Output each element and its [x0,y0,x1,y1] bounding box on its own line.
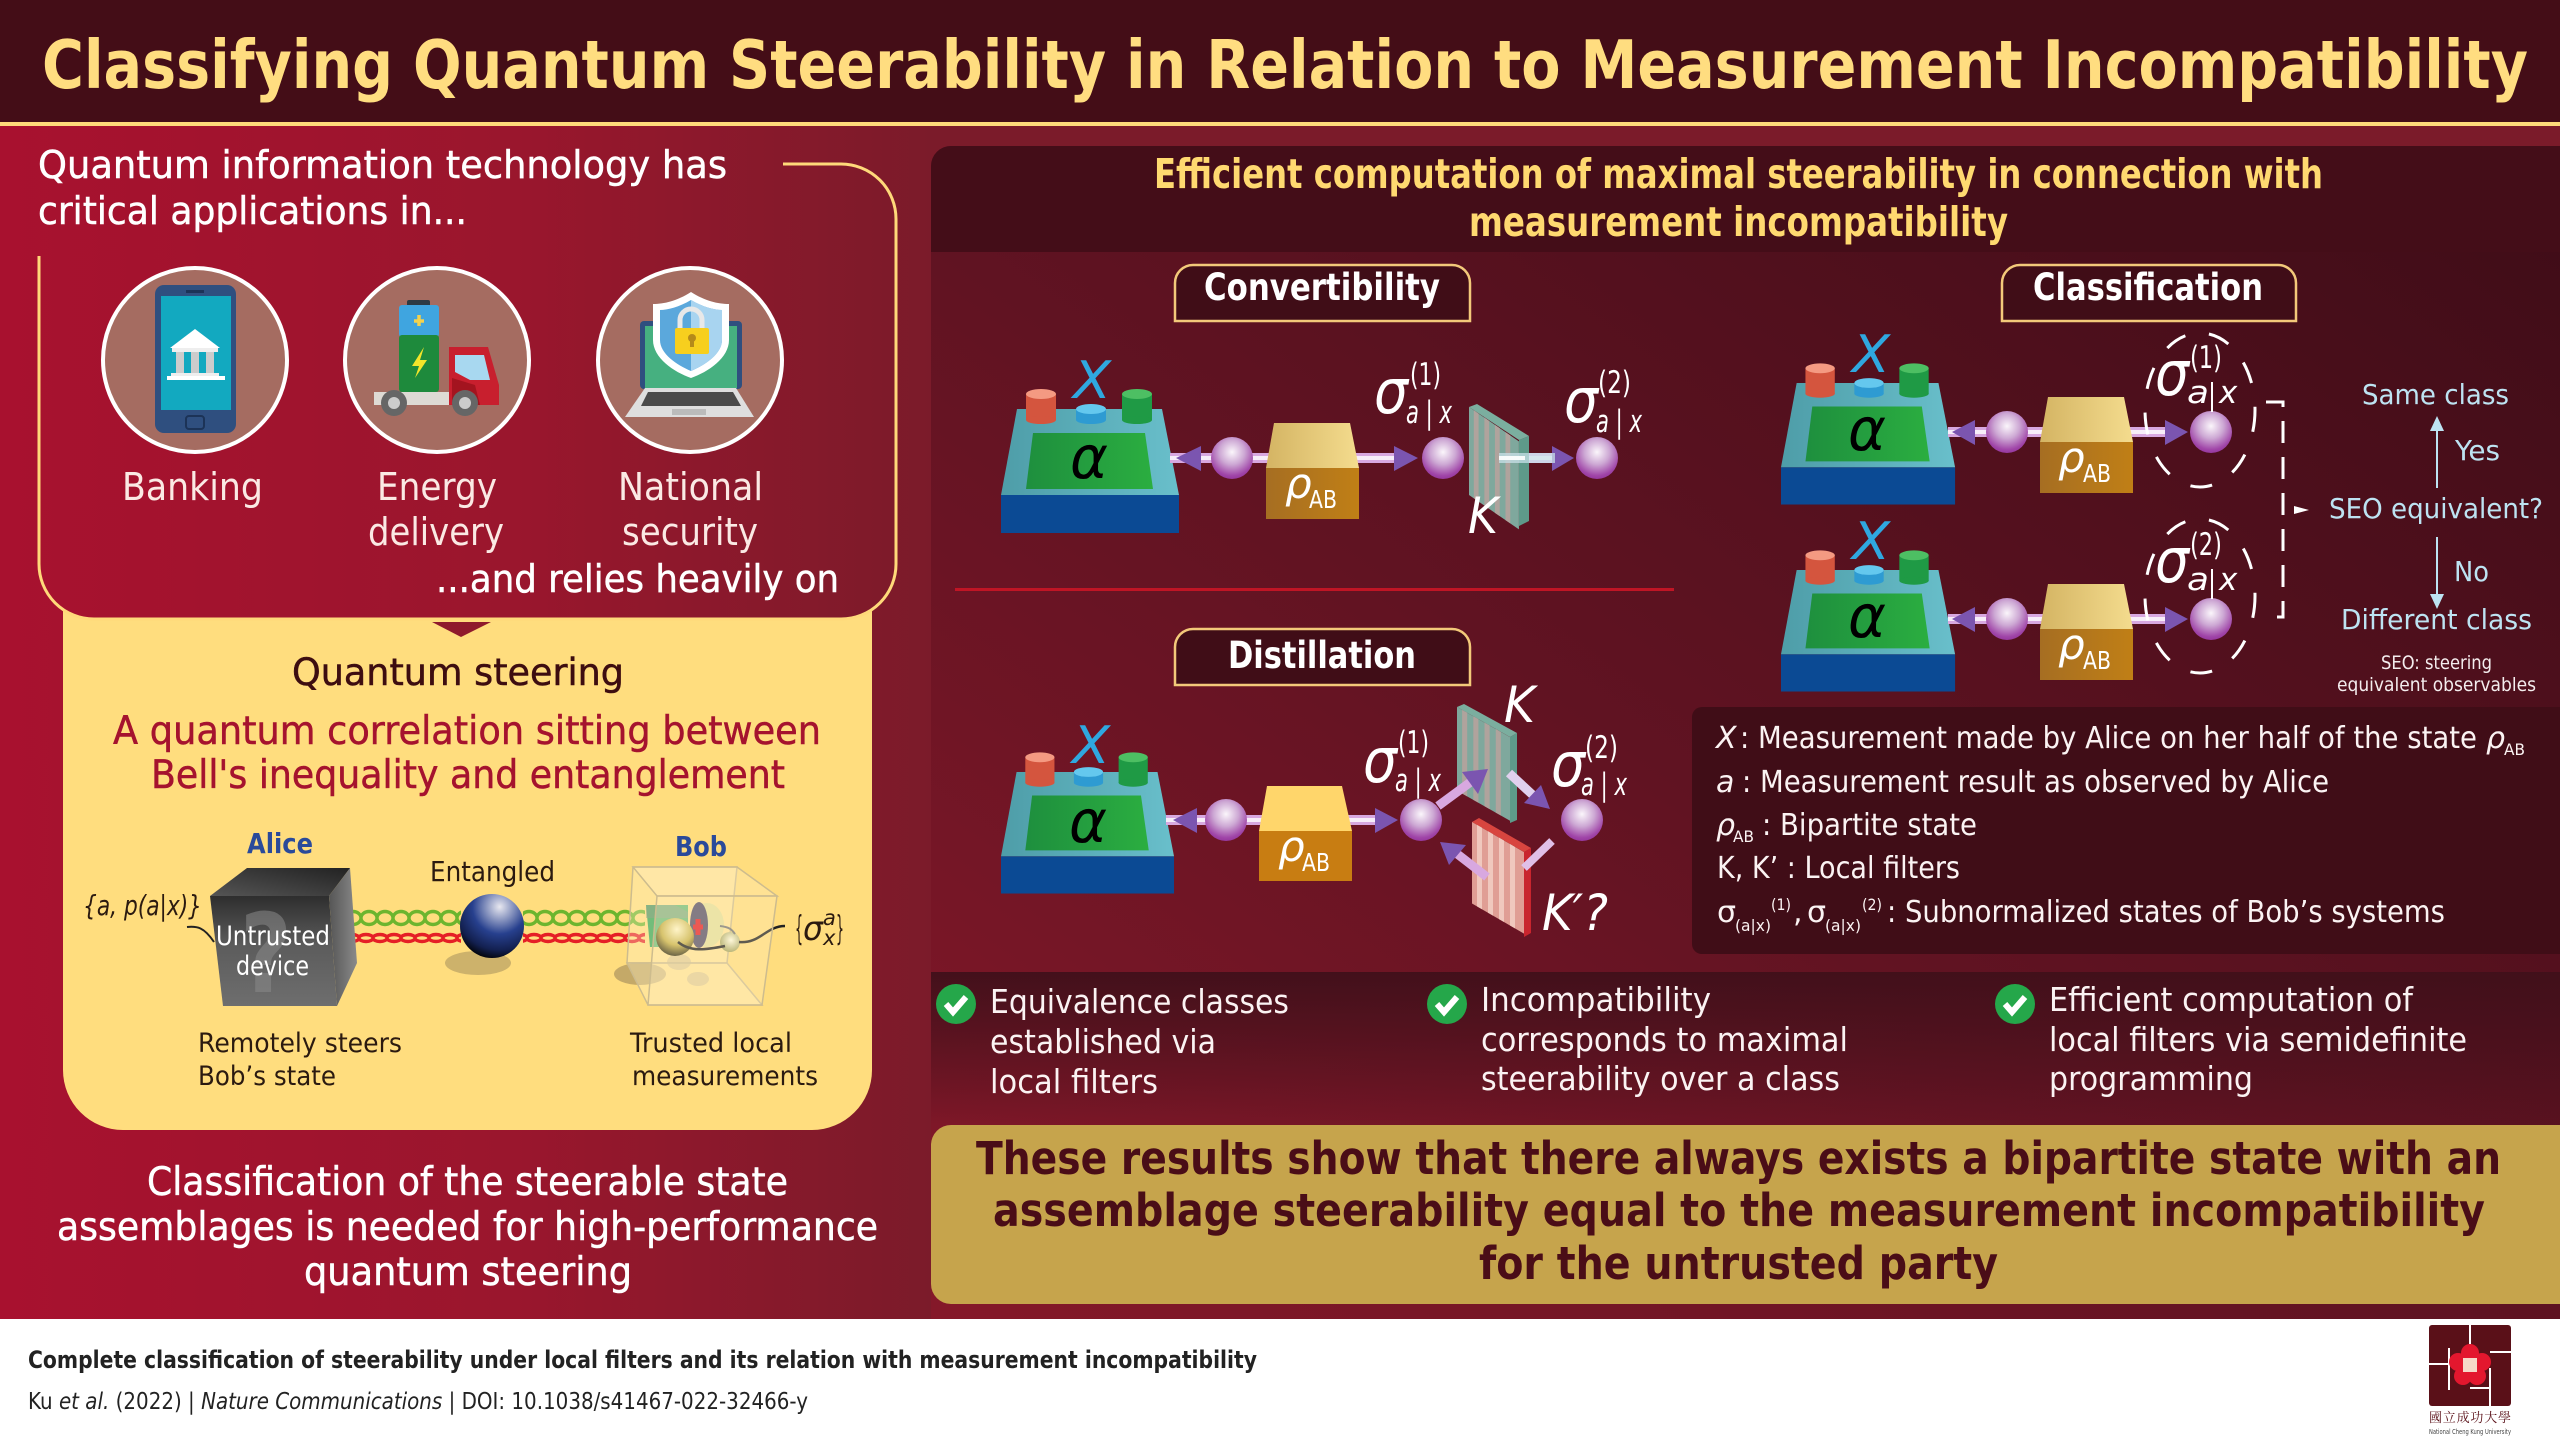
text: Energy delivery [368,465,504,554]
diagram row 2: x [2218,562,2238,598]
entangled sphere [445,894,524,975]
legend panel: ρ [1716,808,1735,843]
Alice output label: {a, p(a|x)} [83,889,202,922]
left conclusion text: assemblages is needed for high-performance [57,1205,878,1250]
label box: Classification [2002,265,2296,321]
text: National security: National [618,465,763,509]
text: Banking: Banking [122,465,263,509]
legend panel: , [1793,895,1803,930]
SEO note: equivalent observables [2337,674,2536,696]
heading text: measurement incompatibility [1469,198,2008,246]
diagram: filter K: K [1468,487,1502,545]
legend panel [1692,707,2560,954]
diagram row 1: AB [2083,459,2111,488]
text: National security: security [622,510,758,554]
diagram: filter K [1468,404,1555,545]
label: K: K [1504,676,1539,734]
diagram: beams and spheres [1166,799,1603,841]
icon: national security laptop [598,268,782,452]
text: Energy delivery: delivery [368,510,504,554]
icon: check [1995,984,2035,1024]
diagram: rho box [1266,423,1359,519]
right dark panel [931,146,2560,1320]
bullet 1: established via [990,1022,1216,1061]
diagram row 1: α [1848,395,1886,465]
diagram: beams, arrows, spheres [1170,437,1618,479]
decision flow: SEO equivalent? [2329,492,2543,525]
diagram: device: X [1070,351,1112,411]
intro text: Quantum information technology has [38,143,727,187]
Alice untrusted device: ? [240,890,292,1018]
label: sigma 2: a | x [1581,767,1627,803]
legend panel: a [1716,765,1734,800]
diagram: device: α [1069,787,1107,857]
diagram: rho box: ρ [1285,459,1312,508]
label: Entangled: Entangled [430,855,555,888]
legend panel: : Subnormalized states of Bob’s systems [1887,895,2445,930]
diagram: rho box: AB [1302,848,1330,877]
diagram: rho box [1259,786,1352,881]
Alice untrusted device: Untrusted [216,921,330,952]
diagram row 2: (2) [2190,527,2222,563]
citation: paper title: Complete classification of steerability under local filters and its relation with measurement incompatibility [28,1346,1257,1374]
Bob output label: { [795,909,803,949]
bullet 3 [1995,980,2467,1098]
Bob output label: σ [803,909,824,949]
legend panel: (a|x) [1735,916,1771,935]
label box: Distillation [1175,629,1470,685]
icon: check [1427,984,1467,1024]
legend panel: : Bipartite state [1762,808,1977,843]
decision flow [2329,378,2543,636]
entanglement helix [345,909,645,944]
diagram: device [1001,351,1179,533]
text: and relies heavily on: ...and relies heavily on [436,557,839,601]
logo: NCKU: 國立成功大學 [2429,1407,2511,1426]
bullet 3: Efficient computation of [2049,980,2414,1019]
caption: trusted local: measurements [632,1061,818,1092]
legend panel: σ [1807,895,1826,930]
label box: Distillation: Distillation [1228,634,1416,677]
diagram row 1: (1) [2190,340,2222,376]
text: National security [618,465,763,554]
label box: Convertibility [1175,265,1470,321]
label: sigma 1: (1) [1410,357,1441,393]
caption: trusted local: Trusted local [629,1028,792,1059]
legend panel: σ [1717,895,1736,930]
label box: Convertibility: Convertibility [1204,266,1440,309]
logo: NCKU: National Cheng Kung University [2429,1428,2511,1436]
Bob output label [795,906,844,950]
caption: Remotely steers: Remotely steers [198,1028,402,1059]
left conclusion text: quantum steering [304,1250,632,1295]
intro text [38,143,727,233]
heading: quantum steering: Quantum steering [292,651,624,694]
diagram: device: X [1069,716,1111,776]
caption: trusted local [629,1028,818,1092]
bullet 1: local filters [990,1062,1158,1101]
label: sigma 1: a | x [1395,763,1441,799]
label: sigma 2: σ [1551,728,1586,801]
Bob output label: x [822,926,836,950]
SEO note: SEO: steering [2381,652,2492,674]
diagram row 1: σ [2155,337,2190,410]
label: sigma 2: (2) [1585,730,1618,766]
panel outline [39,164,896,619]
label: sigma 1: a | x [1406,395,1452,431]
legend panel: AB [2504,740,2525,759]
legend panel: (2) [1862,895,1882,914]
bullet 2: steerability over a class [1481,1059,1840,1098]
label: sigma 2: a | x [1596,404,1642,440]
label: sigma 2 [1564,364,1642,440]
legend panel: X [1714,721,1738,756]
bullet 2: corresponds to maximal [1481,1020,1848,1059]
caption: Remotely steers [198,1028,402,1092]
label: K prime: K′? [1542,884,1608,942]
diagram row 2: ρ [2058,620,2085,669]
decision flow: Same class [2362,378,2509,411]
bullet 3: programming [2049,1059,2253,1098]
diagram: filter K prime [1472,818,1531,937]
label: sigma 1: σ [1363,724,1398,797]
diagram: device [1001,716,1174,894]
icon: energy delivery truck [345,268,529,452]
diagram row 2: σ [2155,524,2190,597]
Bob output label: a [823,906,836,930]
Alice untrusted device [187,868,357,1018]
diagram: device: α [1070,423,1108,493]
divider [955,588,1674,591]
subheading [113,709,821,798]
Alice untrusted device: device [236,951,309,982]
dashed bracket [2266,402,2309,617]
bullet band [931,972,2560,1125]
label box: Classification: Classification [2033,266,2263,309]
diagram row 2: a [2187,562,2209,598]
label: sigma 1 [1363,724,1441,799]
diagram row 1: x [2218,375,2238,411]
bullet 2 [1427,980,1848,1098]
label: sigma 1: (1) [1398,725,1429,761]
legend panel: (1) [1771,895,1791,914]
legend panel: (a|x) [1825,916,1861,935]
bullet 1: Equivalence classes [990,982,1289,1021]
Bob trusted measurement box [614,867,785,1005]
diagram row 1: X [1849,325,1891,385]
footer [0,1319,2560,1440]
diagram row 2: X [1849,512,1891,572]
legend panel: ρ [2486,721,2505,756]
panel: quantum steering [63,600,872,1130]
legend panel: : Measurement made by Alice on her half of the state [1740,721,2477,756]
label: Alice: Alice [247,827,313,860]
caption: Remotely steers: Bob’s state [198,1061,336,1092]
diagram row 1 [1781,325,2255,505]
label: Bob: Bob [675,830,727,863]
diagram row 1: ρ [2058,433,2085,482]
panel: applications [38,143,896,619]
subheading: A quantum correlation sitting between [113,709,821,754]
intro text: critical applications in... [38,189,467,233]
diagram: rho box: AB [1309,485,1337,514]
diagram: rho box: ρ [1278,822,1305,871]
icon: check [936,984,976,1024]
panel: classification [1781,265,2543,696]
diagram row 2: α [1848,582,1886,652]
header band [0,0,2560,126]
panel: distillation [1001,629,1627,942]
decision flow: No [2454,555,2489,588]
diagram: filter K [1457,704,1517,823]
legend panel: : Measurement result as observed by Alice [1742,765,2329,800]
citation: journal: Ku et al. (2022) | Nature Communications | DOI: 10.1038/s41467-022-32466-y [28,1389,808,1415]
panel: quantum steering: } [836,909,844,949]
triangle pointer [432,622,491,637]
diagram: distillation arrows [1438,769,1552,877]
icon: banking phone [103,268,287,452]
diagram row 2: AB [2083,646,2111,675]
left conclusion text [57,1160,878,1295]
label: sigma 1: σ [1374,355,1409,428]
label: sigma 2: σ [1564,364,1599,437]
label: sigma 2: (2) [1598,365,1631,401]
text: Energy delivery: Energy [377,465,497,509]
bullet 1 [936,982,1289,1101]
legend panel: K, K’ : Local filters [1717,851,1960,886]
panel fill [39,164,896,619]
label: sigma 1 [1374,355,1452,431]
panel: convertibility [1001,265,1642,545]
diagram row 1: a [2187,375,2209,411]
subheading: Bell's inequality and entanglement [151,753,785,798]
bullet 2: Incompatibility [1481,980,1711,1019]
decision flow: Yes [2454,434,2500,467]
right panel heading band [931,146,2560,252]
label: sigma 2 [1551,728,1627,803]
conclusion banner [931,1125,2560,1304]
left conclusion text: Classification of the steerable state [147,1160,788,1205]
decision flow: Different class [2341,603,2532,636]
legend panel: AB [1733,827,1754,846]
diagram row 2 [1781,512,2255,692]
bullet 3: local filters via semidefinite [2049,1020,2467,1059]
conclusion banner: for the untrusted party [1479,1237,1998,1290]
logo: NCKU [2429,1325,2511,1436]
SEO note [2337,652,2536,696]
heading text [1154,150,2323,246]
